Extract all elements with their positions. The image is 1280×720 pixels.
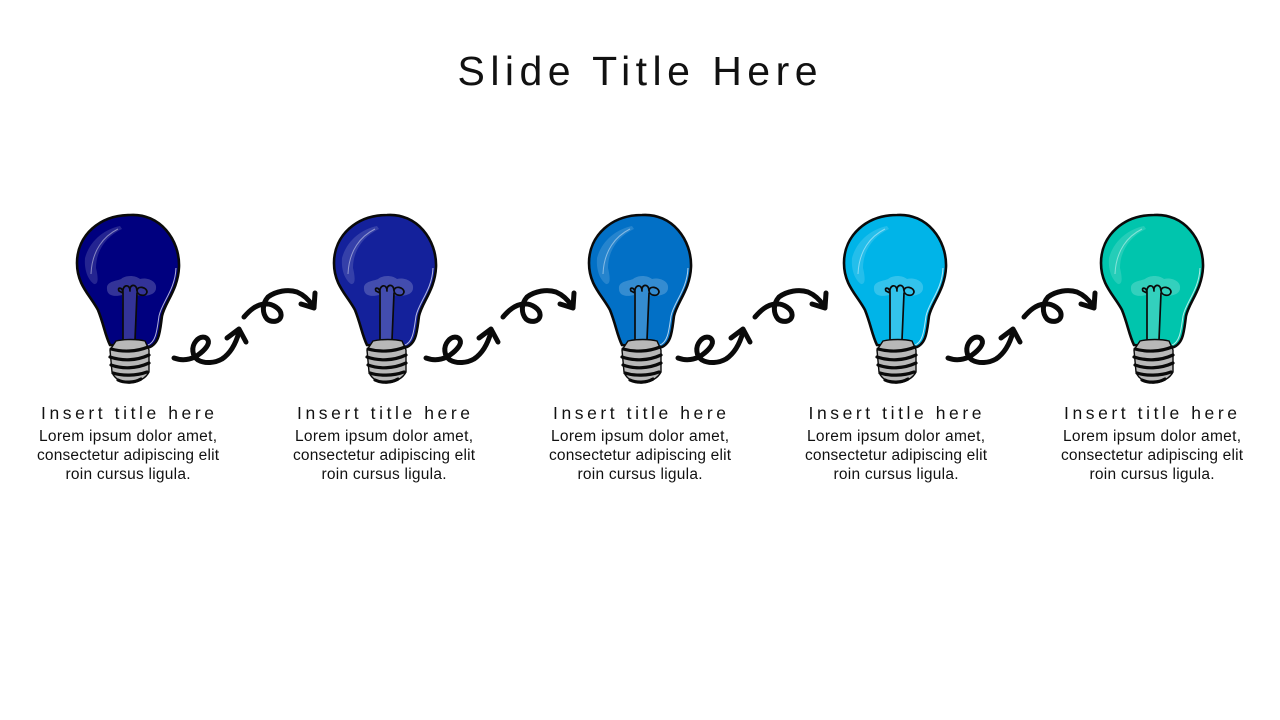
icon: teal light bulb: [1101, 215, 1203, 383]
caption 5: roin cursus ligula.: [1090, 466, 1214, 483]
caption 2: Insert title here: [297, 403, 470, 423]
caption 4: [805, 403, 988, 483]
caption 3: roin cursus ligula.: [578, 466, 702, 483]
arrow: bulb 2 to bulb 3: [426, 291, 574, 363]
caption 1: roin cursus ligula.: [66, 466, 190, 483]
caption 1: consectetur adipiscing elit: [37, 447, 220, 464]
icon: sky blue light bulb: [844, 215, 946, 383]
icon: dark navy light bulb: [77, 215, 179, 383]
caption 3: consectetur adipiscing elit: [549, 447, 732, 464]
caption 1: Lorem ipsum dolor amet,: [39, 428, 217, 445]
title: Slide Title Here: [458, 48, 818, 94]
caption 5: Lorem ipsum dolor amet,: [1063, 428, 1241, 445]
caption 4: Lorem ipsum dolor amet,: [807, 428, 985, 445]
caption 2: roin cursus ligula.: [322, 466, 446, 483]
caption 5: Insert title here: [1064, 403, 1237, 423]
caption 3: Insert title here: [553, 403, 726, 423]
caption 4: Insert title here: [808, 403, 982, 423]
caption 3: [549, 403, 732, 483]
caption 1: [37, 403, 220, 483]
icon: medium blue light bulb: [589, 215, 691, 383]
caption 5: consectetur adipiscing elit: [1061, 447, 1244, 464]
arrow: bulb 4 to bulb 5: [948, 291, 1095, 363]
caption 1: Insert title here: [41, 403, 214, 423]
caption 2: [293, 403, 476, 483]
caption 3: Lorem ipsum dolor amet,: [551, 428, 729, 445]
caption 4: consectetur adipiscing elit: [805, 447, 988, 464]
caption 2: consectetur adipiscing elit: [293, 447, 476, 464]
caption 5: [1061, 403, 1244, 483]
arrow: bulb 1 to bulb 2: [174, 291, 315, 363]
arrow: bulb 3 to bulb 4: [678, 291, 826, 363]
caption 2: Lorem ipsum dolor amet,: [295, 428, 473, 445]
icon: royal blue light bulb: [334, 215, 436, 383]
caption 4: roin cursus ligula.: [834, 466, 958, 483]
